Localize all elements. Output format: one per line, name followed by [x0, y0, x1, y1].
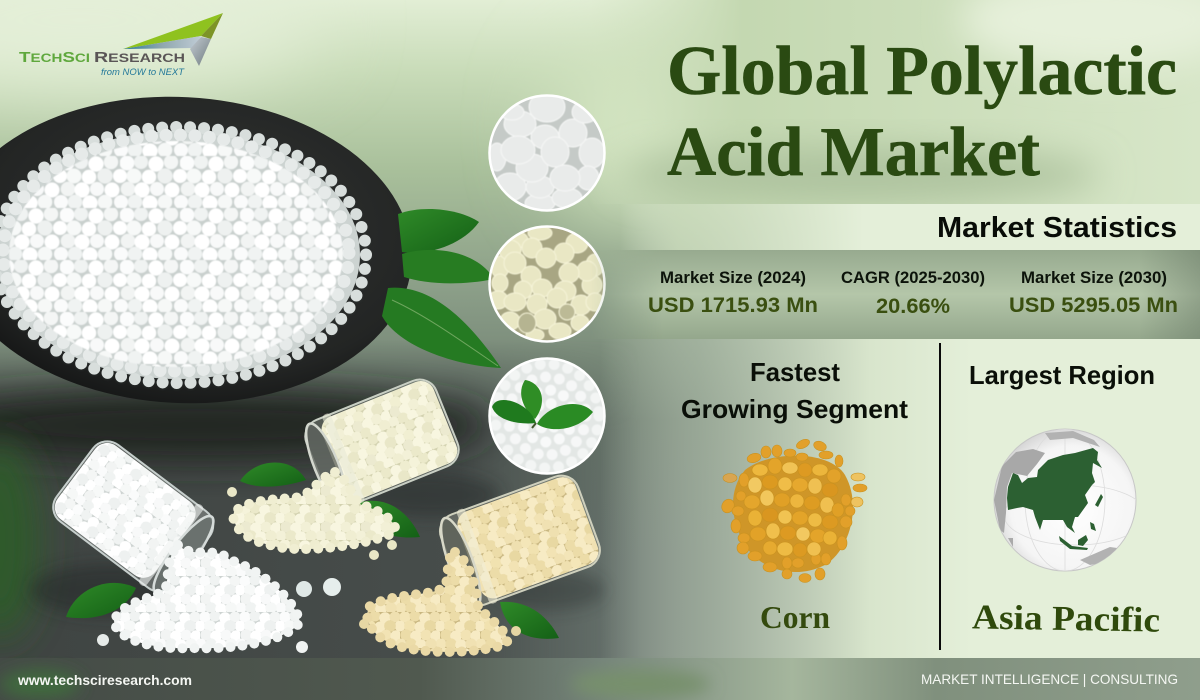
- stat: market size 2024: Market Size (2024): [660, 268, 806, 287]
- panel: lower section background: [600, 339, 1200, 658]
- label: asia pacific: Asia Pacific: [972, 597, 1160, 640]
- icon: globe highlighting Asia Pacific: [994, 429, 1146, 571]
- panel: market statistics heading: [620, 204, 1200, 250]
- pile of pellets: [0, 127, 366, 383]
- tagline: MARKET INTELLIGENCE | CONSULTING: [921, 671, 1178, 687]
- label: corn: Corn: [760, 599, 830, 635]
- panel: largest region: [969, 360, 1160, 640]
- stat: CAGR: 20.66%: [876, 295, 950, 318]
- icon: corn kernels: [719, 437, 867, 582]
- logo: TechSci Research: TECH SCI: [19, 49, 90, 66]
- product photo: black plate with white pellets: [0, 85, 501, 415]
- panel: largest region: Largest Region: [969, 360, 1155, 390]
- logo mark: [123, 13, 223, 66]
- title: Acid Market: [667, 114, 1040, 191]
- website: www.techsciresearch.com: [17, 672, 192, 688]
- circle: cream pellets close-up: [488, 226, 605, 342]
- logo: TechSci Research: from NOW to NEXT: [101, 67, 185, 78]
- stat: market size 2030: Market Size (2030): [1021, 268, 1167, 287]
- jar: yellow pellets: [359, 469, 606, 652]
- plate: [0, 85, 420, 415]
- jar: white pellets: [45, 433, 308, 653]
- stat: market size 2024: USD 1715.93 Mn: [648, 294, 818, 317]
- panel: fastest growing segment: Growing Segment: [681, 394, 908, 424]
- panel: market statistics heading: Market Statistics: [937, 212, 1177, 244]
- stat: market size 2030: [1009, 268, 1178, 317]
- title: [667, 33, 1177, 191]
- leaf trio: [492, 380, 593, 429]
- stat: CAGR: [841, 268, 985, 318]
- stat: market size 2030: USD 5295.05 Mn: [1009, 294, 1178, 317]
- title: Global Polylactic: [667, 33, 1177, 110]
- panel: fastest growing segment: [681, 357, 908, 635]
- jar: cream pellets: [227, 372, 465, 597]
- circle: white pellets with green leaves: [489, 358, 605, 474]
- stat: market size 2024: [648, 268, 818, 317]
- leaves behind plate: [382, 209, 501, 368]
- divider: [939, 343, 941, 650]
- panel: fastest growing segment: Fastest: [750, 357, 840, 387]
- circle: clear pellets close-up: [488, 92, 605, 212]
- shadows under jars: [30, 564, 190, 616]
- logo: TechSci Research: R ESEARCH: [94, 49, 185, 66]
- stat: CAGR: CAGR (2025-2030): [841, 268, 985, 287]
- logo: TechSci Research: [19, 13, 223, 78]
- footer: [0, 658, 1200, 700]
- panel: market statistics values: [590, 250, 1200, 339]
